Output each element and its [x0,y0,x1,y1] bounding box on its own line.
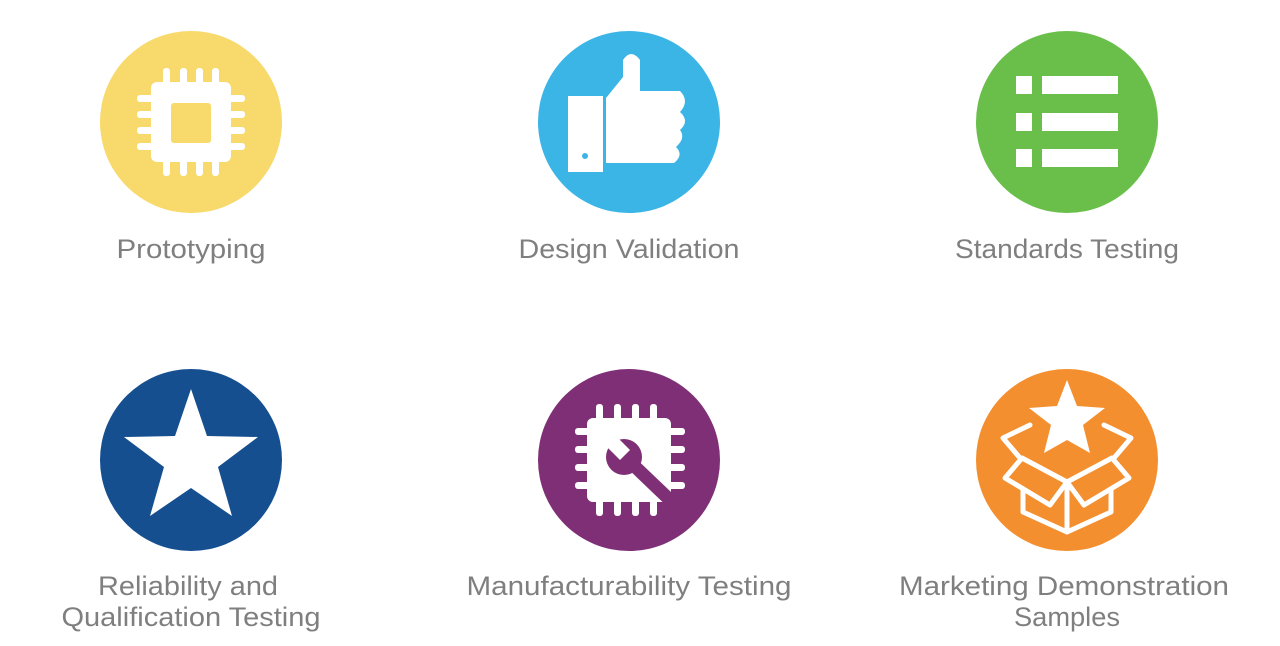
icon: box with star [976,369,1158,551]
panel: prototyping [100,31,282,264]
label: prototyping: Prototyping [116,234,266,264]
icon: list [976,31,1158,213]
panel: standards testing [955,31,1179,264]
panel: design validation [518,31,740,264]
label: standards testing: Standards Testing [955,234,1179,264]
panel: reliability: Qualification Testing [62,602,320,632]
panel: marketing samples [899,369,1229,632]
icon: chip [100,31,282,213]
icon: thumbs up [538,31,720,213]
label: design validation: Design Validation [518,234,740,264]
icon: chip with wrench [538,369,720,551]
panel: manufacturability [466,369,792,601]
label: reliability: Reliability and [98,571,278,601]
label: marketing samples: Marketing Demonstration [899,571,1229,601]
panel: marketing samples: Samples [1014,602,1120,632]
panel: reliability [62,369,320,632]
icon: star [100,369,282,551]
label: manufacturability: Manufacturability Testing [466,571,792,601]
